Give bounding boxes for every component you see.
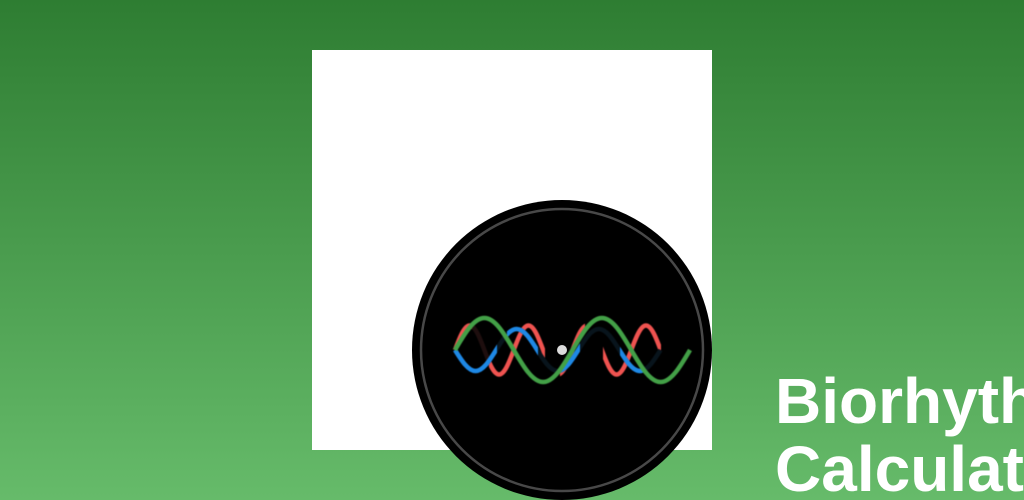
biorhythm watch face [412, 200, 712, 500]
title [775, 367, 1024, 500]
watch ring [421, 209, 703, 491]
red physical curve [455, 326, 661, 374]
center dot [557, 345, 567, 355]
blue emotional curve [455, 329, 660, 371]
watch body [412, 200, 712, 500]
white app icon panel [312, 50, 712, 450]
biorhythm curves [455, 318, 690, 382]
green intellectual curve [455, 318, 690, 382]
